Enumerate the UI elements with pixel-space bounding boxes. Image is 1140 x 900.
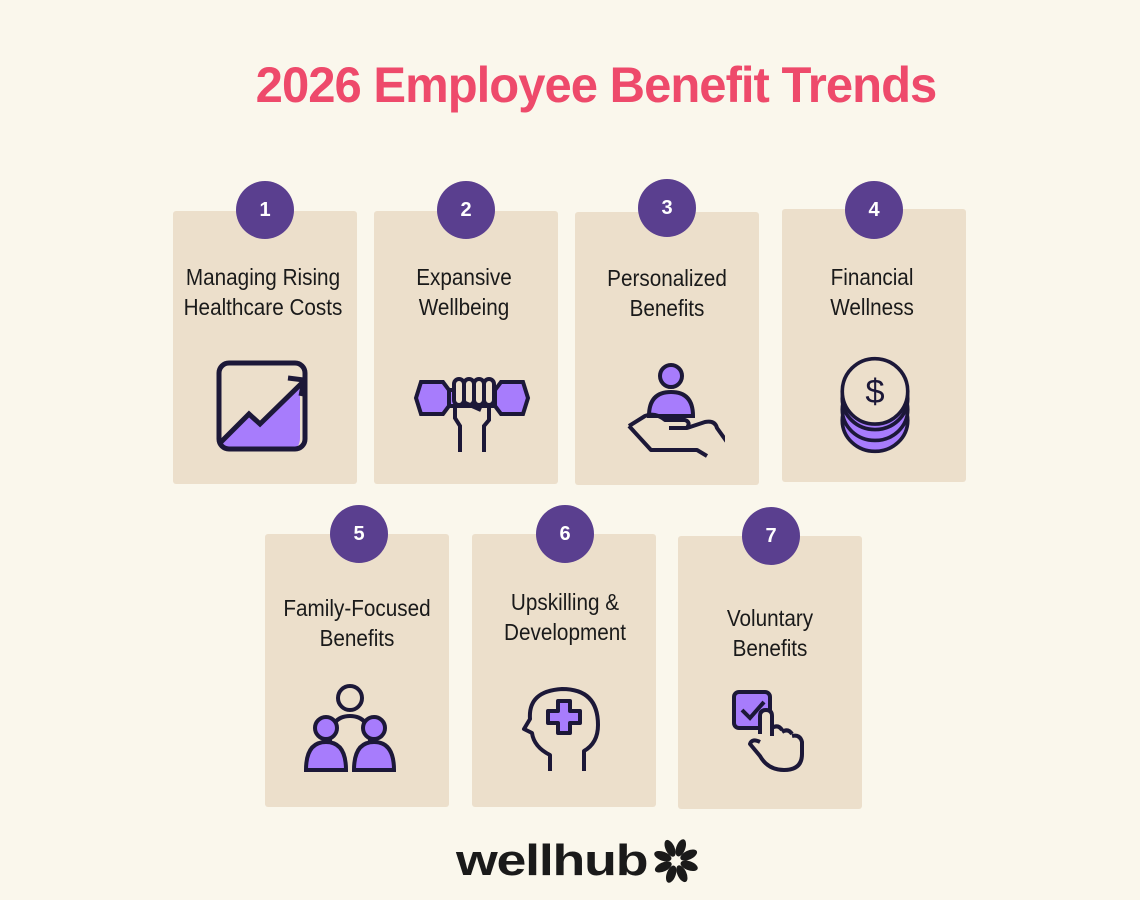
label 6: Development — [504, 619, 626, 645]
badge 2: 2 — [460, 199, 472, 221]
badge 2 — [437, 181, 495, 239]
logo: wellhub: wellhub — [456, 836, 647, 885]
label 2 — [416, 264, 512, 320]
badge 4 — [845, 181, 903, 239]
badge 5: 5 — [353, 523, 365, 545]
badge 7: 7 — [765, 525, 777, 547]
label 6 — [504, 589, 626, 645]
label 1: Healthcare Costs — [184, 294, 342, 320]
label 7 — [727, 605, 813, 661]
icon: coins — [840, 356, 910, 454]
icon: chart up — [216, 360, 308, 452]
icon: coins: $ — [865, 373, 885, 411]
card 4 — [782, 209, 966, 482]
label 7: Voluntary — [727, 605, 813, 631]
badge 3 — [638, 179, 696, 237]
badge 4: 4 — [868, 199, 880, 221]
label 5: Family-Focused — [283, 595, 431, 621]
icon: checkbox click — [732, 690, 804, 772]
label 4: Wellness — [830, 294, 914, 320]
card 6 — [472, 534, 656, 807]
icon: head with plus — [522, 687, 600, 771]
card 2 — [374, 211, 558, 484]
label 2: Expansive — [416, 264, 512, 290]
label 4 — [830, 264, 914, 320]
card 1 — [173, 211, 357, 484]
label 6: Upskilling & — [511, 589, 619, 615]
card 5 — [265, 534, 449, 807]
label 2: Wellbeing — [419, 294, 509, 320]
icon: hand with person — [628, 363, 725, 458]
label 5: Benefits — [320, 625, 394, 651]
badge 6 — [536, 505, 594, 563]
badge 1 — [236, 181, 294, 239]
badge 3: 3 — [661, 197, 673, 219]
card 3 — [575, 212, 759, 485]
label 3: Benefits — [630, 295, 704, 321]
icon: family — [304, 684, 396, 772]
label 1 — [184, 264, 342, 320]
card 7 — [678, 536, 862, 809]
label 4: Financial — [831, 264, 913, 290]
icon: dumbbell — [414, 377, 530, 452]
title: 2026 Employee Benefit Trends — [256, 57, 936, 113]
label 3 — [607, 265, 727, 321]
label 5 — [283, 595, 431, 651]
badge 7 — [742, 507, 800, 565]
label 1: Managing Rising — [186, 264, 340, 290]
badge 6: 6 — [559, 523, 571, 545]
badge 5 — [330, 505, 388, 563]
label 3: Personalized — [607, 265, 727, 291]
label 7: Benefits — [733, 635, 807, 661]
badge 1: 1 — [259, 199, 271, 221]
